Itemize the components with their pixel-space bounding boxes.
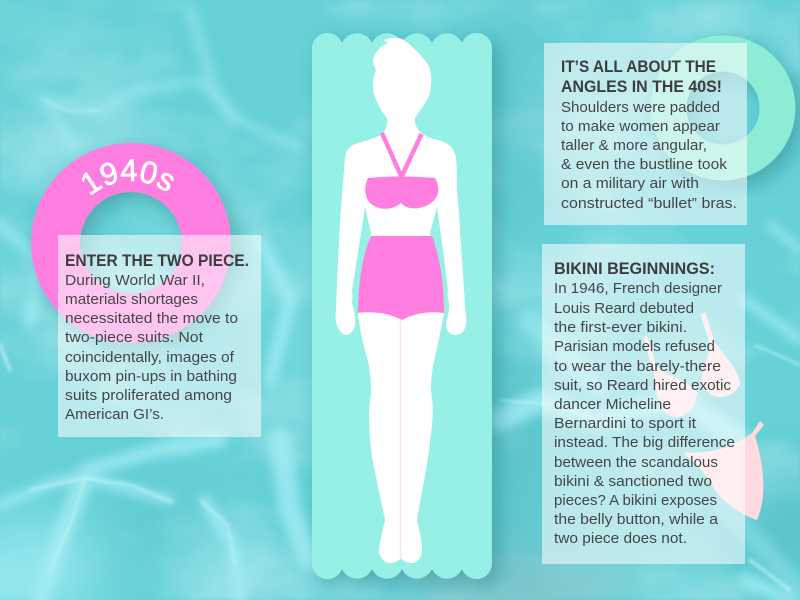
body text: bikini: Bernardini to sport it	[554, 415, 697, 432]
heading: angles	[561, 58, 722, 96]
halter straps	[382, 133, 422, 177]
body text: bikini: pieces? A bikini exposes	[554, 492, 717, 509]
heading: bikini beginnings: BIKINI BEGINNINGS:	[554, 260, 715, 278]
body text: bikini: between the scandalous	[554, 454, 718, 471]
body text: angles: constructed “bullet” bras.	[561, 195, 737, 212]
body text: bikini: dancer Micheline	[554, 396, 671, 413]
body text: bikini: Parisian models refused	[554, 338, 715, 355]
body text: bikini: instead. The big difference	[554, 434, 735, 451]
leg divider	[400, 320, 402, 558]
body text: angles: & even the bustline took	[561, 156, 728, 173]
panel: angles in the 40s	[544, 43, 747, 225]
figure in two-piece	[336, 38, 466, 563]
body silhouette	[336, 38, 466, 563]
body text: angles	[561, 99, 737, 212]
pool ring: pink	[56, 168, 206, 318]
body text: two piece: During World War II,	[65, 272, 205, 289]
body text: angles: on a military air with	[561, 175, 699, 192]
body text: bikini: two piece does not.	[554, 530, 687, 547]
body text: bikini: the belly button, while a	[554, 511, 719, 528]
pool float	[312, 33, 492, 579]
pool ring: mint	[668, 54, 778, 162]
heading: enter the two piece: ENTER THE TWO PIECE.	[65, 252, 249, 270]
body text: two piece: American GI’s.	[65, 406, 164, 423]
heading: angles: ANGLES IN THE 40S!	[561, 78, 722, 96]
panel: enter the two piece	[58, 235, 261, 437]
body text: two piece: materials shortages	[65, 291, 198, 308]
heading: angles: IT’S ALL ABOUT THE	[561, 58, 716, 76]
body text: two piece: necessitated the move to	[65, 310, 238, 327]
body text: bikini: bikini & sanctioned two	[554, 473, 712, 490]
body text: bikini: to wear the barely-there	[554, 358, 721, 375]
body text: two piece: buxom pin-ups in bathing	[65, 368, 237, 385]
body text: angles: taller & more angular,	[561, 137, 707, 154]
body text: bikini: suit, so Reard hired exotic	[554, 377, 732, 394]
bikini top	[365, 176, 438, 209]
body text: two piece: suits proliferated among	[65, 387, 232, 404]
body text: bikini: the first-ever bikini.	[554, 319, 687, 336]
body text: bikini	[554, 280, 735, 547]
ring label: 1940s: 1940s	[82, 159, 174, 196]
body text: angles: Shoulders were padded	[561, 99, 720, 116]
body text: bikini: Louis Reard debuted	[554, 300, 694, 317]
body text: two piece: coincidentally, images of	[65, 349, 235, 366]
icon: bikini pieces	[643, 312, 764, 520]
panel: bikini beginnings	[542, 244, 745, 564]
body text: two piece: two-piece suits. Not	[65, 329, 204, 346]
body text: bikini: In 1946, French designer	[554, 280, 722, 297]
high-waisted bottoms	[358, 236, 444, 320]
body text: two piece	[65, 272, 238, 423]
body text: angles: to make women appear	[561, 118, 720, 135]
